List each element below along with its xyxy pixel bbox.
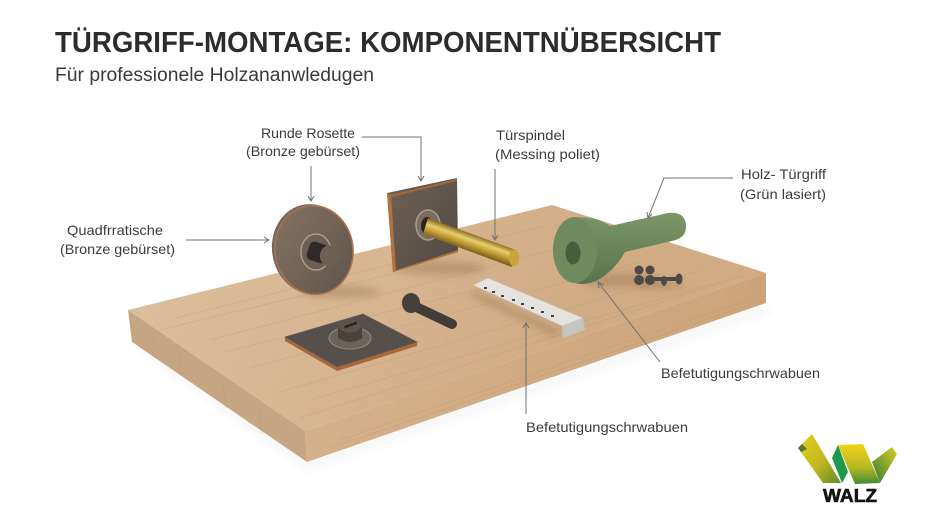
label: Runde Rosette: Runde Rosette <box>261 125 355 141</box>
component: bolt <box>402 293 452 324</box>
arrow: Holz-Türgriff <box>647 178 733 218</box>
label: Türspindel: (Messing poliet) <box>495 146 600 162</box>
label: Quadfrratische <box>60 222 175 257</box>
component: round rosette <box>266 199 359 299</box>
spindle <box>423 218 516 267</box>
label: Holz-Türgriff: Holz- Türgriff <box>741 166 826 182</box>
board left edge <box>128 310 307 462</box>
label: Quadfrratische: (Bronze gebürset) <box>60 241 175 257</box>
wood grain <box>150 226 764 448</box>
wooden board <box>128 205 770 466</box>
arrow: Befetutigungschrwabuen lower <box>523 323 529 414</box>
label: Runde Rosette: (Bronze gebürset) <box>246 143 360 159</box>
logo: Walz: WALZ <box>823 486 877 506</box>
logo: Walz <box>798 434 897 506</box>
board shadow <box>140 308 770 466</box>
component: measuring tape <box>473 278 585 338</box>
label: Türspindel: Türspindel <box>496 127 565 143</box>
board right edge <box>305 273 766 462</box>
title: TÜRGRIFF-MONTAGE: KOMPONENTNÜBERSICHT <box>55 26 721 59</box>
label: Befetutigungschrwabuen lower: Befetutigungschrwabuen <box>526 419 688 435</box>
arrow: Befetutigungschrwabuen right <box>598 282 660 362</box>
label: Türspindel <box>495 127 600 162</box>
label: Quadfrratische: Quadfrratische <box>67 222 163 238</box>
component: flat square plate <box>285 314 417 371</box>
arrow: Türspindel <box>492 169 498 240</box>
arrow: Runde Rosette to square plate <box>362 137 424 181</box>
subtitle: Für professionele Holzananwledugen <box>55 65 374 86</box>
label: Holz-Türgriff: (Grün lasiert) <box>740 186 826 202</box>
component: square plate with spindle <box>387 178 519 272</box>
label: Runde Rosette <box>246 125 360 159</box>
arrow: Quadfrratische <box>186 237 269 243</box>
component: wooden handle <box>553 213 686 284</box>
component: screws <box>634 266 682 286</box>
label: Befetutigungschrwabuen right: Befetutigungschrwabuen <box>661 365 820 381</box>
board top surface <box>128 205 766 431</box>
object shadows <box>300 261 685 336</box>
label: Holz-Türgriff <box>740 166 826 202</box>
arrow: Runde Rosette to disc <box>308 166 314 201</box>
